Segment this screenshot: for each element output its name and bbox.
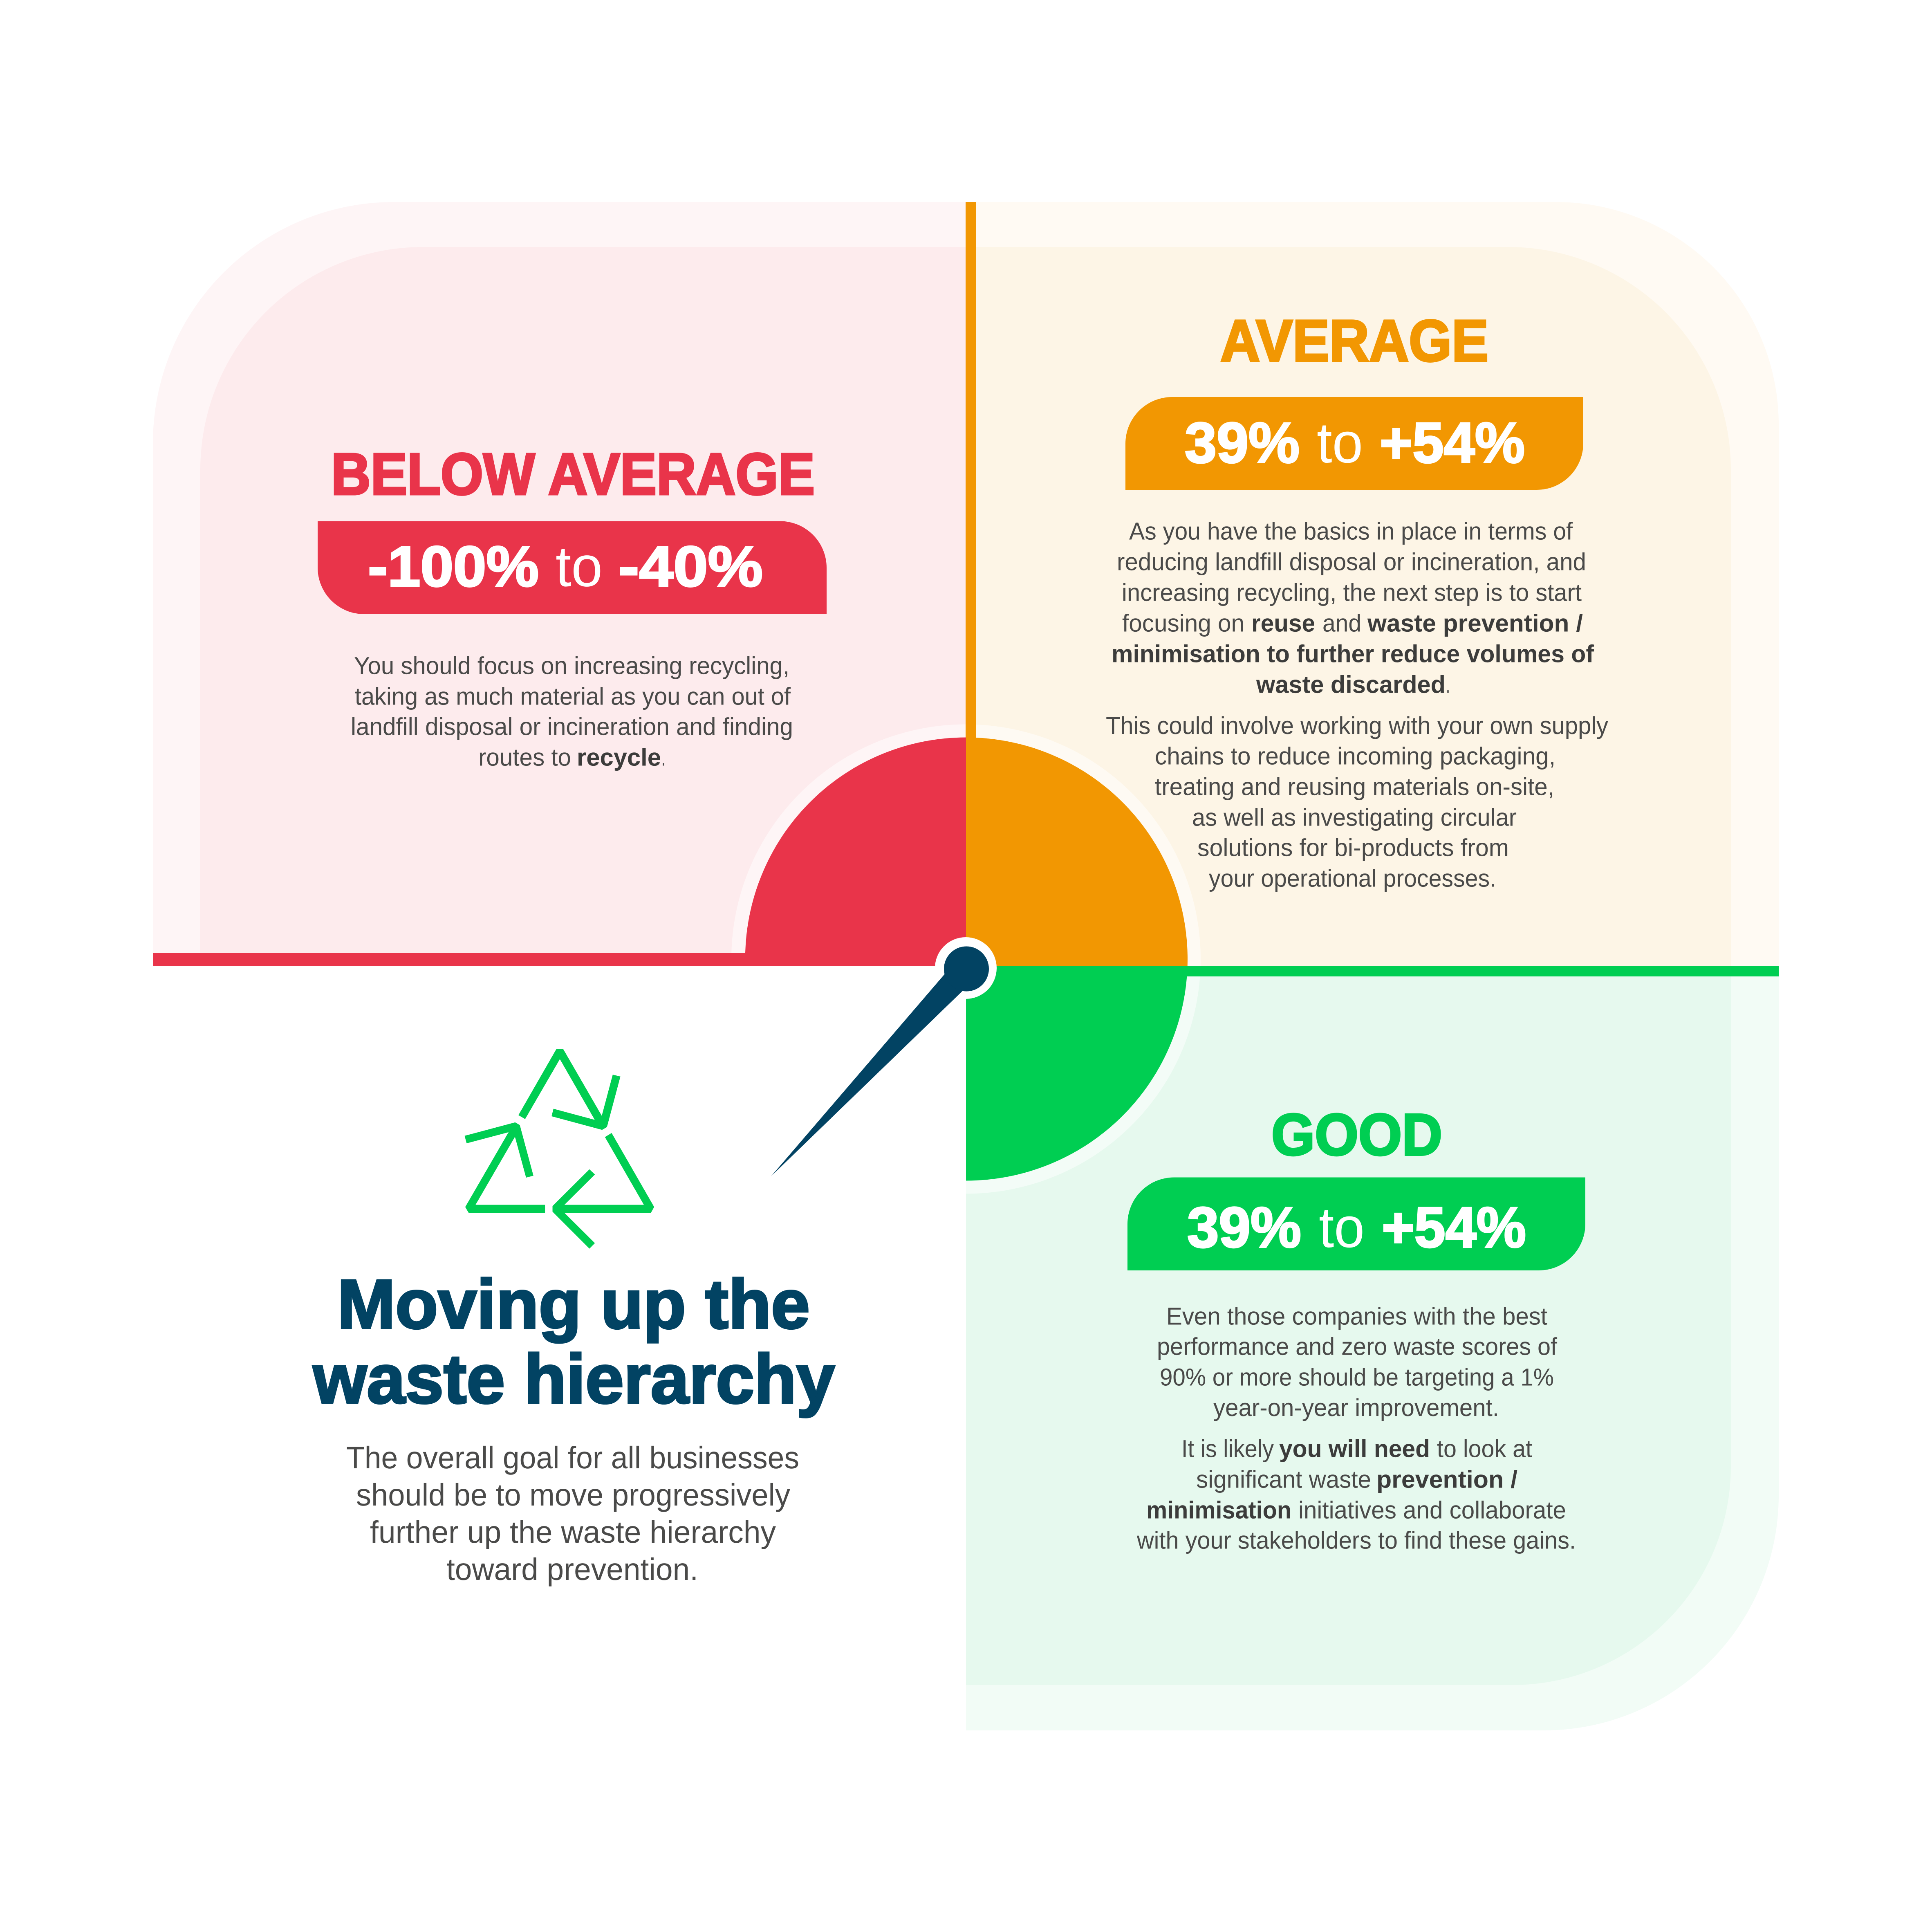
text block: average first paragraph: As you have the basics in place in terms of [1129,518,1573,545]
text block: overall goal: should be to move progressively [356,1478,790,1512]
text block: average first paragraph: and [1322,609,1361,637]
text block: overall goal: toward prevention. [446,1552,698,1587]
text block: good first paragraph: 90% or more should be targeting a 1% [1160,1363,1554,1391]
range badge: 39% to +54% [1125,397,1583,490]
heading: good: GOOD [1271,1102,1442,1168]
text block: below average advice: . [661,743,666,771]
text block: good first paragraph: performance and zero waste scores of [1157,1333,1557,1360]
text block: average first paragraph: focusing on [1122,609,1244,637]
text block: below average advice: You should focus on increasing recycling, [354,652,789,680]
range badge: 39% to +54%: to [1319,1195,1365,1259]
text block: average second paragraph: chains to reduce incoming packaging, [1155,743,1555,770]
range badge: -100% to -40%: -40% [619,534,763,599]
range badge: 39% to +54%: +54% [1382,1195,1526,1259]
range badge: 39% to +54% [1127,1178,1585,1270]
panel: good [966,966,1779,1730]
text block: good second paragraph: initiatives and collaborate [1298,1497,1566,1524]
text block: good second paragraph: with your stakeholders to find these gains. [1136,1527,1576,1554]
range badge: 39% to +54%: +54% [1380,411,1525,475]
heading: below average: BELOW AVERAGE [331,441,815,507]
gauge needle [771,946,989,1176]
text block: average second paragraph: This could involve working with your own supply [1106,712,1608,739]
panel: average [976,202,1779,966]
gauge segment: red sector [745,738,966,966]
text block: below average advice [351,652,793,771]
text block: good second paragraph: you will need [1279,1435,1430,1462]
text block: good first paragraph [1157,1303,1557,1421]
range badge: 39% to +54%: 39% [1187,1195,1301,1259]
text block: average second paragraph: as well as investigating circular [1192,804,1517,831]
text block: average first paragraph: waste discarded [1256,671,1446,698]
text block: below average advice: recycle [577,743,661,771]
text block: good second paragraph: to look at [1437,1435,1532,1462]
text block: average first paragraph: waste prevention / [1367,609,1583,637]
text block: average first paragraph [1112,518,1594,698]
text block: below average advice: routes to [478,743,571,771]
text block: average second paragraph: treating and reusing materials on-site, [1155,773,1554,801]
range badge: 39% to +54%: to [1317,411,1363,475]
title: moving up the waste hierarchy [313,1266,835,1418]
panel: below average [153,202,966,953]
text block: average second paragraph: your operational processes. [1209,864,1496,892]
text block: overall goal: The overall goal for all businesses [346,1441,799,1475]
text block: average first paragraph: . [1446,671,1450,698]
text block: below average advice: taking as much material as you can out of [355,683,791,710]
text block: average second paragraph [1106,712,1608,892]
text block: good second paragraph [1136,1435,1576,1554]
text block: good first paragraph: year-on-year improvement. [1213,1394,1499,1421]
text block: good second paragraph: It is likely [1181,1435,1274,1462]
range badge: -100% to -40% [318,521,827,614]
range badge: 39% to +54%: 39% [1185,411,1300,475]
text block: good second paragraph: significant waste [1196,1465,1371,1493]
text block: average first paragraph: minimisation to further reduce volumes of [1112,640,1594,667]
heading: average: AVERAGE [1220,308,1488,374]
text block: overall goal [346,1441,799,1587]
text block: below average advice: landfill disposal or incineration and finding [351,713,793,740]
title: moving up the waste hierarchy: Moving up the [337,1266,810,1343]
text block: average first paragraph: increasing recycling, the next step is to start [1122,579,1582,606]
gauge dial [153,202,1779,1194]
gauge segment: green sector [966,966,1188,1181]
text block: good second paragraph: minimisation [1146,1497,1291,1524]
text block: overall goal: further up the waste hierarchy [370,1515,776,1550]
text block: good second paragraph: prevention / [1376,1465,1517,1493]
text block: average first paragraph: reducing landfill disposal or incineration, and [1117,548,1586,576]
gauge hub ring [935,937,997,999]
text block: average first paragraph: reuse [1251,609,1315,637]
title: moving up the waste hierarchy: waste hierarchy [313,1340,835,1418]
range badge: -100% to -40%: to [556,534,603,599]
range badge: -100% to -40%: -100% [368,534,539,599]
text block: good first paragraph: Even those companies with the best [1166,1303,1547,1330]
icon: recycling arrows [464,1049,654,1249]
text block: average second paragraph: solutions for bi-products from [1197,834,1509,861]
gauge segment: orange sector [966,738,1188,966]
